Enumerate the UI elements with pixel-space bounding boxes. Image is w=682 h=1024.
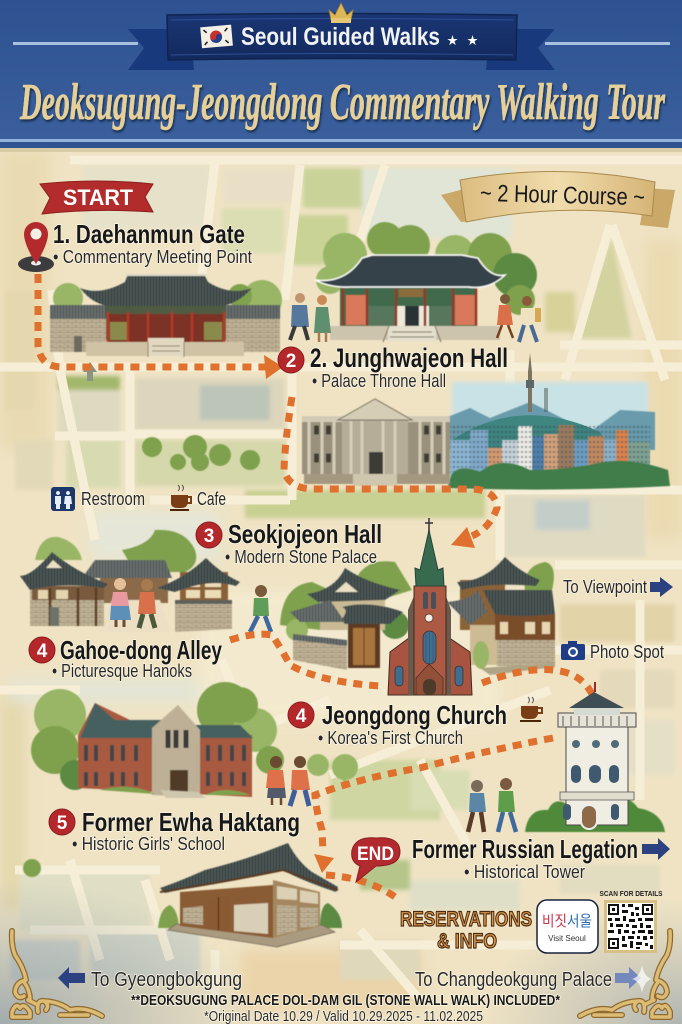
panel: header band — [0, 0, 682, 152]
label: To Viewpoint: To Viewpoint — [563, 577, 647, 597]
logo: Visit Seoul: 비짓서울 — [542, 913, 592, 930]
badge: 2 hour course ribbon — [441, 171, 675, 228]
label: Former Ewha Haktang: Former Ewha Haktang — [82, 807, 300, 837]
route: Junghwajeon to Seokjojeon — [284, 397, 497, 548]
label: To Gyeongbokgung — [58, 967, 242, 991]
back hanok — [82, 560, 172, 578]
label: Former Russian Legation — [412, 834, 670, 882]
label: Former Ewha Haktang: 5 — [57, 813, 68, 834]
illustration: park trees — [142, 435, 260, 471]
logo: Visit Seoul: Visit Seoul — [548, 934, 586, 943]
illustration: Former Ewha Haktang school — [31, 682, 284, 798]
illustration: small hanok at end — [23, 843, 342, 947]
label: Former Ewha Haktang — [49, 807, 300, 854]
route: church to Ewha and end — [314, 738, 553, 899]
marker: END bubble — [352, 838, 400, 882]
people: girls with backpacks — [266, 756, 310, 806]
ribbon text: Seoul Guided Walks — [241, 23, 440, 51]
label: Daehanmun Gate: • Commentary Meeting Point — [53, 247, 252, 267]
route: Daehanmun to Junghwajeon — [38, 274, 283, 379]
label: reservations and info: RESERVATIONS — [400, 908, 532, 931]
label: Junghwajeon Hall: 2. Junghwajeon Hall — [310, 343, 508, 373]
label: Junghwajeon Hall: 2 — [286, 351, 296, 372]
label: Photo Spot — [561, 641, 664, 662]
label: Daehanmun Gate — [53, 219, 252, 267]
label: Jeongdong Church: Jeongdong Church — [322, 700, 507, 730]
label: To Changdeokgung Palace: To Changdeokgung Palace — [415, 969, 612, 991]
small trees near church label — [307, 754, 358, 785]
people: walker with backpack — [250, 585, 271, 632]
label: Former Ewha Haktang: • Historic Girls' School — [72, 834, 225, 854]
illustration: Former Russian Legation tower — [525, 682, 665, 832]
badge: START — [40, 181, 153, 214]
label: Gahoe-dong Alley: • Picturesque Hanoks — [52, 661, 192, 681]
ornament: left corner — [12, 931, 102, 1017]
legend: cafe — [170, 485, 226, 511]
people: group right of Junghwajeon — [497, 294, 541, 342]
label: Gahoe-dong Alley: 4 — [37, 641, 48, 662]
note: stone wall walk included: **DEOKSUGUNG PALACE DOL-DAM GIL (STONE WALL WALK) INCLUDED* — [131, 992, 560, 1009]
label: To Gyeongbokgung: To Gyeongbokgung — [91, 969, 242, 991]
route: Gahoe-dong to church to legation — [230, 634, 592, 694]
label: Seokjojeon Hall: 3 — [204, 526, 214, 547]
illustration: Junghwajeon Hall — [315, 255, 505, 342]
people: hikers near tower — [468, 778, 516, 832]
illustration: Daehanmun Gate — [50, 274, 282, 357]
legend: restroom — [51, 487, 145, 511]
illustration: central hanok — [280, 561, 412, 670]
illustration: Seoul skyline — [440, 353, 670, 490]
label: scan for details: SCAN FOR DETAILS — [600, 889, 662, 898]
decorative stars: ★ — [447, 35, 458, 47]
label: Jeongdong Church: • Korea's First Church — [318, 728, 463, 748]
label: Former Russian Legation: • Historical Tower — [464, 862, 585, 882]
label: Seokjojeon Hall: • Modern Stone Palace — [225, 547, 377, 567]
illustration: Jeongdong Church — [388, 518, 472, 695]
badge: 2 hour course ribbon: ~ 2 Hour Course ~ — [480, 180, 645, 211]
icon: crown — [329, 3, 353, 23]
label: Gahoe-dong Alley — [29, 635, 222, 681]
ornament: right corner — [580, 931, 670, 1017]
marker: END bubble: END — [357, 844, 394, 865]
illustration: Seokjojeon Hall — [302, 399, 450, 486]
QR code — [604, 900, 657, 953]
illustration: trees behind Junghwajeon — [316, 222, 537, 315]
label: Jeongdong Church — [288, 697, 542, 748]
label: reservations and info — [400, 908, 532, 953]
logo: Visit Seoul — [537, 900, 598, 953]
icon: coffee cup — [520, 697, 542, 722]
illustration: right hanok group — [447, 557, 555, 675]
people: couple in alley — [110, 578, 156, 628]
illustration: Gahoe-dong hanok alley — [20, 530, 240, 632]
legend: cafe: Cafe — [197, 489, 226, 509]
icon: Korean flag — [200, 25, 233, 48]
legend: restroom: Restroom — [81, 489, 145, 509]
label: Gahoe-dong Alley: Gahoe-dong Alley — [60, 635, 222, 665]
label: Daehanmun Gate: 1. Daehanmun Gate — [53, 219, 245, 249]
small north arrow marker — [83, 362, 97, 381]
ribbon banner: Seoul Guided Walks — [128, 3, 555, 70]
label: Junghwajeon Hall: • Palace Throne Hall — [312, 371, 446, 391]
label: Photo Spot: Photo Spot — [590, 642, 664, 662]
people: group left of Junghwajeon — [290, 293, 331, 342]
label: reservations and info: & INFO — [437, 930, 497, 953]
label: Junghwajeon Hall — [278, 343, 508, 391]
marker: start pin — [18, 222, 54, 272]
badge: START: START — [63, 185, 134, 210]
label: Seokjojeon Hall: Seokjojeon Hall — [228, 519, 382, 549]
label: Seokjojeon Hall — [196, 519, 382, 567]
label: Jeongdong Church: 4 — [296, 706, 307, 727]
ribbon banner: Seoul Guided Walks: ★ — [467, 35, 478, 47]
